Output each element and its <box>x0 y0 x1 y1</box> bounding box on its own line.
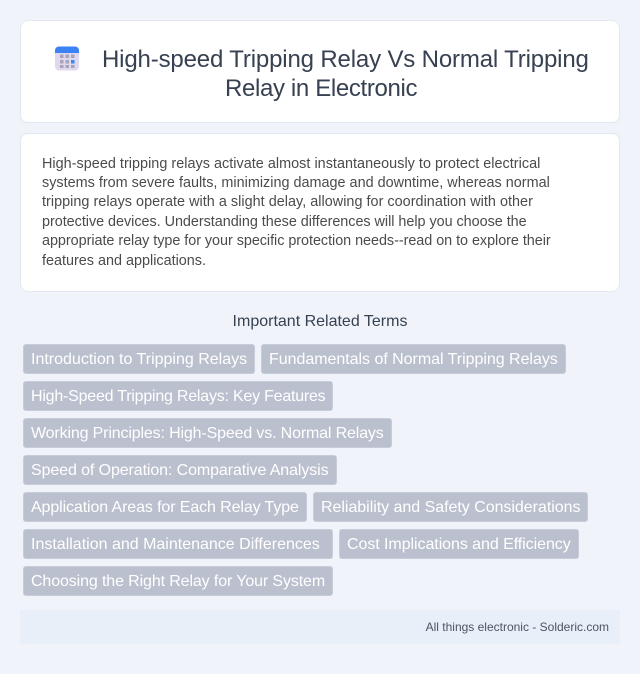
text block: summary: appropriate relay type for your specific protection needs--read on to explore their <box>42 233 551 249</box>
tag: Installation and Maintenance Differences <box>31 536 320 553</box>
tag: Fundamentals of Normal Tripping Relays <box>269 351 558 368</box>
text block: summary: tripping relays operate with a slight delay, allowing for coordination with other <box>42 194 533 210</box>
footer <box>20 610 620 644</box>
tag <box>23 529 333 559</box>
icon: calendar <box>55 46 79 70</box>
tag <box>261 344 566 374</box>
title: Relay in Electronic <box>225 75 417 102</box>
tag: Speed of Operation: Comparative Analysis <box>31 462 329 479</box>
tag <box>339 529 579 559</box>
tag: Application Areas for Each Relay Type <box>31 499 299 516</box>
tag: Reliability and Safety Considerations <box>321 499 580 516</box>
panel: title card <box>20 20 620 123</box>
panel: summary text <box>20 133 620 292</box>
text block: summary: High-speed tripping relays activate almost instantaneously to protect electrical <box>42 156 540 172</box>
tag <box>23 381 333 411</box>
tag: Introduction to Tripping Relays <box>31 351 247 368</box>
tag list <box>23 344 588 596</box>
tag: High-Speed Tripping Relays: Key Features <box>31 388 325 405</box>
tag <box>23 418 392 448</box>
tag: Working Principles: High-Speed vs. Normal Relays <box>31 425 384 442</box>
tag: Choosing the Right Relay for Your System <box>31 573 325 590</box>
text block: summary: protective devices. Understanding these differences will help you choose the <box>42 214 527 230</box>
tag <box>23 566 333 596</box>
heading: important related terms: Important Related Terms <box>233 313 407 330</box>
tag <box>23 344 255 374</box>
tag <box>313 492 588 522</box>
tag <box>23 455 337 485</box>
tag <box>23 492 307 522</box>
tag: Cost Implications and Efficiency <box>347 536 571 553</box>
footer: All things electronic - Solderic.com <box>426 620 609 634</box>
title: High-speed Tripping Relay Vs Normal Tripping <box>102 46 589 73</box>
text block: summary: systems from severe faults, minimizing damage and downtime, whereas normal <box>42 175 550 191</box>
text block: summary <box>42 156 551 269</box>
title <box>102 46 589 102</box>
text block: summary: features and applications. <box>42 253 206 269</box>
